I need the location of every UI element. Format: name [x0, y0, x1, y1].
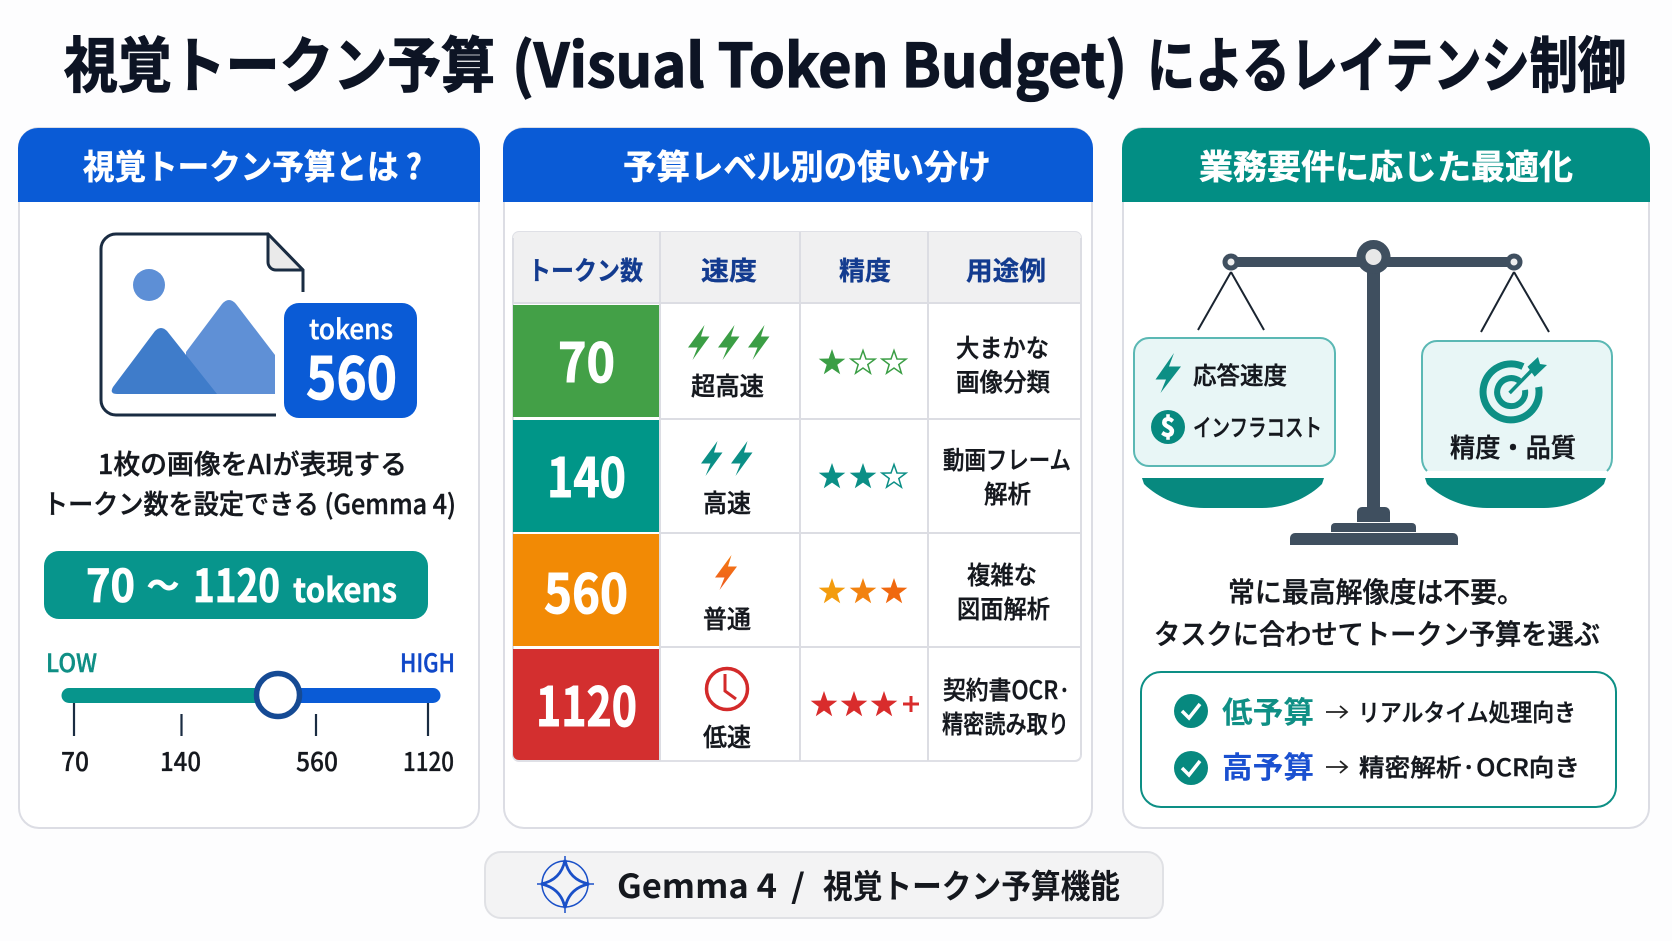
- arrow: high budget: [1326, 761, 1347, 773]
- left pan: [1142, 478, 1324, 508]
- slider: token level: 140: [160, 742, 201, 779]
- row: 140 tokens: 140: [547, 434, 626, 513]
- row: 560 tokens: 普通: [703, 600, 751, 636]
- title: 視覚トークン予算: [64, 18, 495, 105]
- icon: image document with token badge: 560: [306, 332, 397, 416]
- panel heading: usage by budget level: 予算レベル別の使い分け: [623, 140, 991, 189]
- row: 1120 tokens: 契約書OCR·: [943, 671, 1071, 707]
- table header row: トークン数: [528, 251, 643, 288]
- footer text: /: [791, 860, 805, 908]
- right pan: [1425, 478, 1606, 508]
- panel heading: what is visual token budget: [18, 128, 480, 202]
- row: 140 tokens: 動画フレーム: [943, 441, 1071, 477]
- footer text: Gemma 4: [617, 860, 777, 908]
- box: accuracy and quality: 精度・品質: [1450, 428, 1576, 465]
- footer badge: [485, 852, 1163, 918]
- callout: low and high budget guidance: リアルタイム処理向き: [1358, 693, 1576, 728]
- row: 140 tokens: 解析: [984, 475, 1031, 511]
- row: 560 tokens: 560: [544, 550, 628, 629]
- panel: what is visual token budget: [18, 128, 480, 828]
- table header row: 速度: [701, 251, 757, 288]
- callout: low and high budget guidance: 低予算: [1222, 688, 1314, 732]
- table header row: [528, 251, 1046, 288]
- title: [64, 18, 1626, 105]
- table header row: 精度: [839, 251, 891, 288]
- panel heading: optimization by requirements: [1122, 128, 1650, 202]
- box: accuracy and quality: [1422, 341, 1612, 471]
- panel heading: optimization by requirements: 業務要件に応じた最適化: [1199, 140, 1573, 189]
- row: 1120 tokens: 低速: [703, 718, 751, 754]
- icon: balance scale: [1142, 244, 1606, 545]
- icon: Gemma sparkle: [537, 856, 594, 913]
- text block: description: [43, 443, 456, 522]
- slider: token level: LOW: [46, 644, 97, 680]
- panel heading: usage by budget level: [503, 128, 1093, 202]
- row: 70 tokens: 70: [558, 319, 615, 398]
- row: 1120 tokens: 精密読み取り: [942, 705, 1069, 741]
- slider: token level: 560: [296, 742, 338, 779]
- callout: low and high budget guidance: 精密解析·OCR向き: [1359, 748, 1580, 783]
- row: 70 tokens: 超高速: [691, 367, 764, 403]
- panel: usage by budget level: [503, 128, 1093, 828]
- text block: key message: [1154, 571, 1600, 653]
- table: budget levels: [513, 232, 1081, 761]
- token range pill: [44, 550, 428, 619]
- icon: dollar coin: [1151, 408, 1185, 444]
- row: 70 tokens: [513, 305, 1050, 417]
- footer text: [617, 860, 1120, 908]
- slider: token level: 70: [61, 742, 89, 779]
- title: (Visual Token Budget): [512, 18, 1127, 105]
- slider: token level: [46, 644, 455, 779]
- callout: low and high budget guidance: [1141, 672, 1616, 807]
- box: response speed and infrastructure cost: 応答速度: [1193, 356, 1287, 391]
- slider: token level: HIGH: [400, 644, 455, 680]
- panel: optimization by requirements: [1122, 128, 1650, 828]
- row: 70 tokens: 画像分類: [956, 363, 1050, 399]
- text block: description: 1枚の画像をAIが表現する: [98, 443, 407, 482]
- text block: description: トークン数を設定できる (Gemma 4): [43, 483, 456, 522]
- slider: token level: 1120: [403, 742, 454, 779]
- token range pill: 70: [86, 550, 135, 615]
- token range pill: tokens: [293, 564, 397, 612]
- row: 1120 tokens: [513, 649, 1071, 760]
- row: 140 tokens: [513, 420, 1071, 532]
- row: 140 tokens: 高速: [703, 484, 751, 520]
- row: 70 tokens: 大まかな: [956, 329, 1049, 365]
- panel heading: what is visual token budget: 視覚トークン予算とは ?: [83, 140, 422, 189]
- arrow: low budget: [1326, 706, 1347, 718]
- token range pill: ～: [147, 561, 179, 607]
- box: response speed and infrastructure cost: [1134, 338, 1335, 466]
- table header row: 用途例: [966, 251, 1046, 288]
- row: 1120 tokens: 1120: [536, 663, 637, 742]
- icon: target with arrow: [1483, 357, 1547, 420]
- text block: key message: 常に最高解像度は不要。: [1228, 571, 1524, 611]
- icon: image document with token badge: [101, 234, 417, 418]
- icon: check high budget: [1174, 751, 1208, 785]
- icon: lightning bolt: [1156, 353, 1181, 393]
- text block: key message: タスクに合わせてトークン予算を選ぶ: [1154, 613, 1600, 653]
- token range pill: 1120: [193, 550, 280, 615]
- row: 560 tokens: 図面解析: [957, 590, 1050, 626]
- callout: low and high budget guidance: 高予算: [1222, 743, 1314, 787]
- footer text: 視覚トークン予算機能: [823, 860, 1120, 908]
- row: 560 tokens: [513, 534, 1050, 646]
- row: 560 tokens: 複雑な: [967, 556, 1037, 592]
- box: response speed and infrastructure cost: インフラコスト: [1193, 408, 1322, 443]
- icon: check low budget: [1174, 694, 1208, 728]
- icon: image document with token badge: tokens: [309, 308, 393, 347]
- icon: dollar coin: $: [1161, 408, 1175, 444]
